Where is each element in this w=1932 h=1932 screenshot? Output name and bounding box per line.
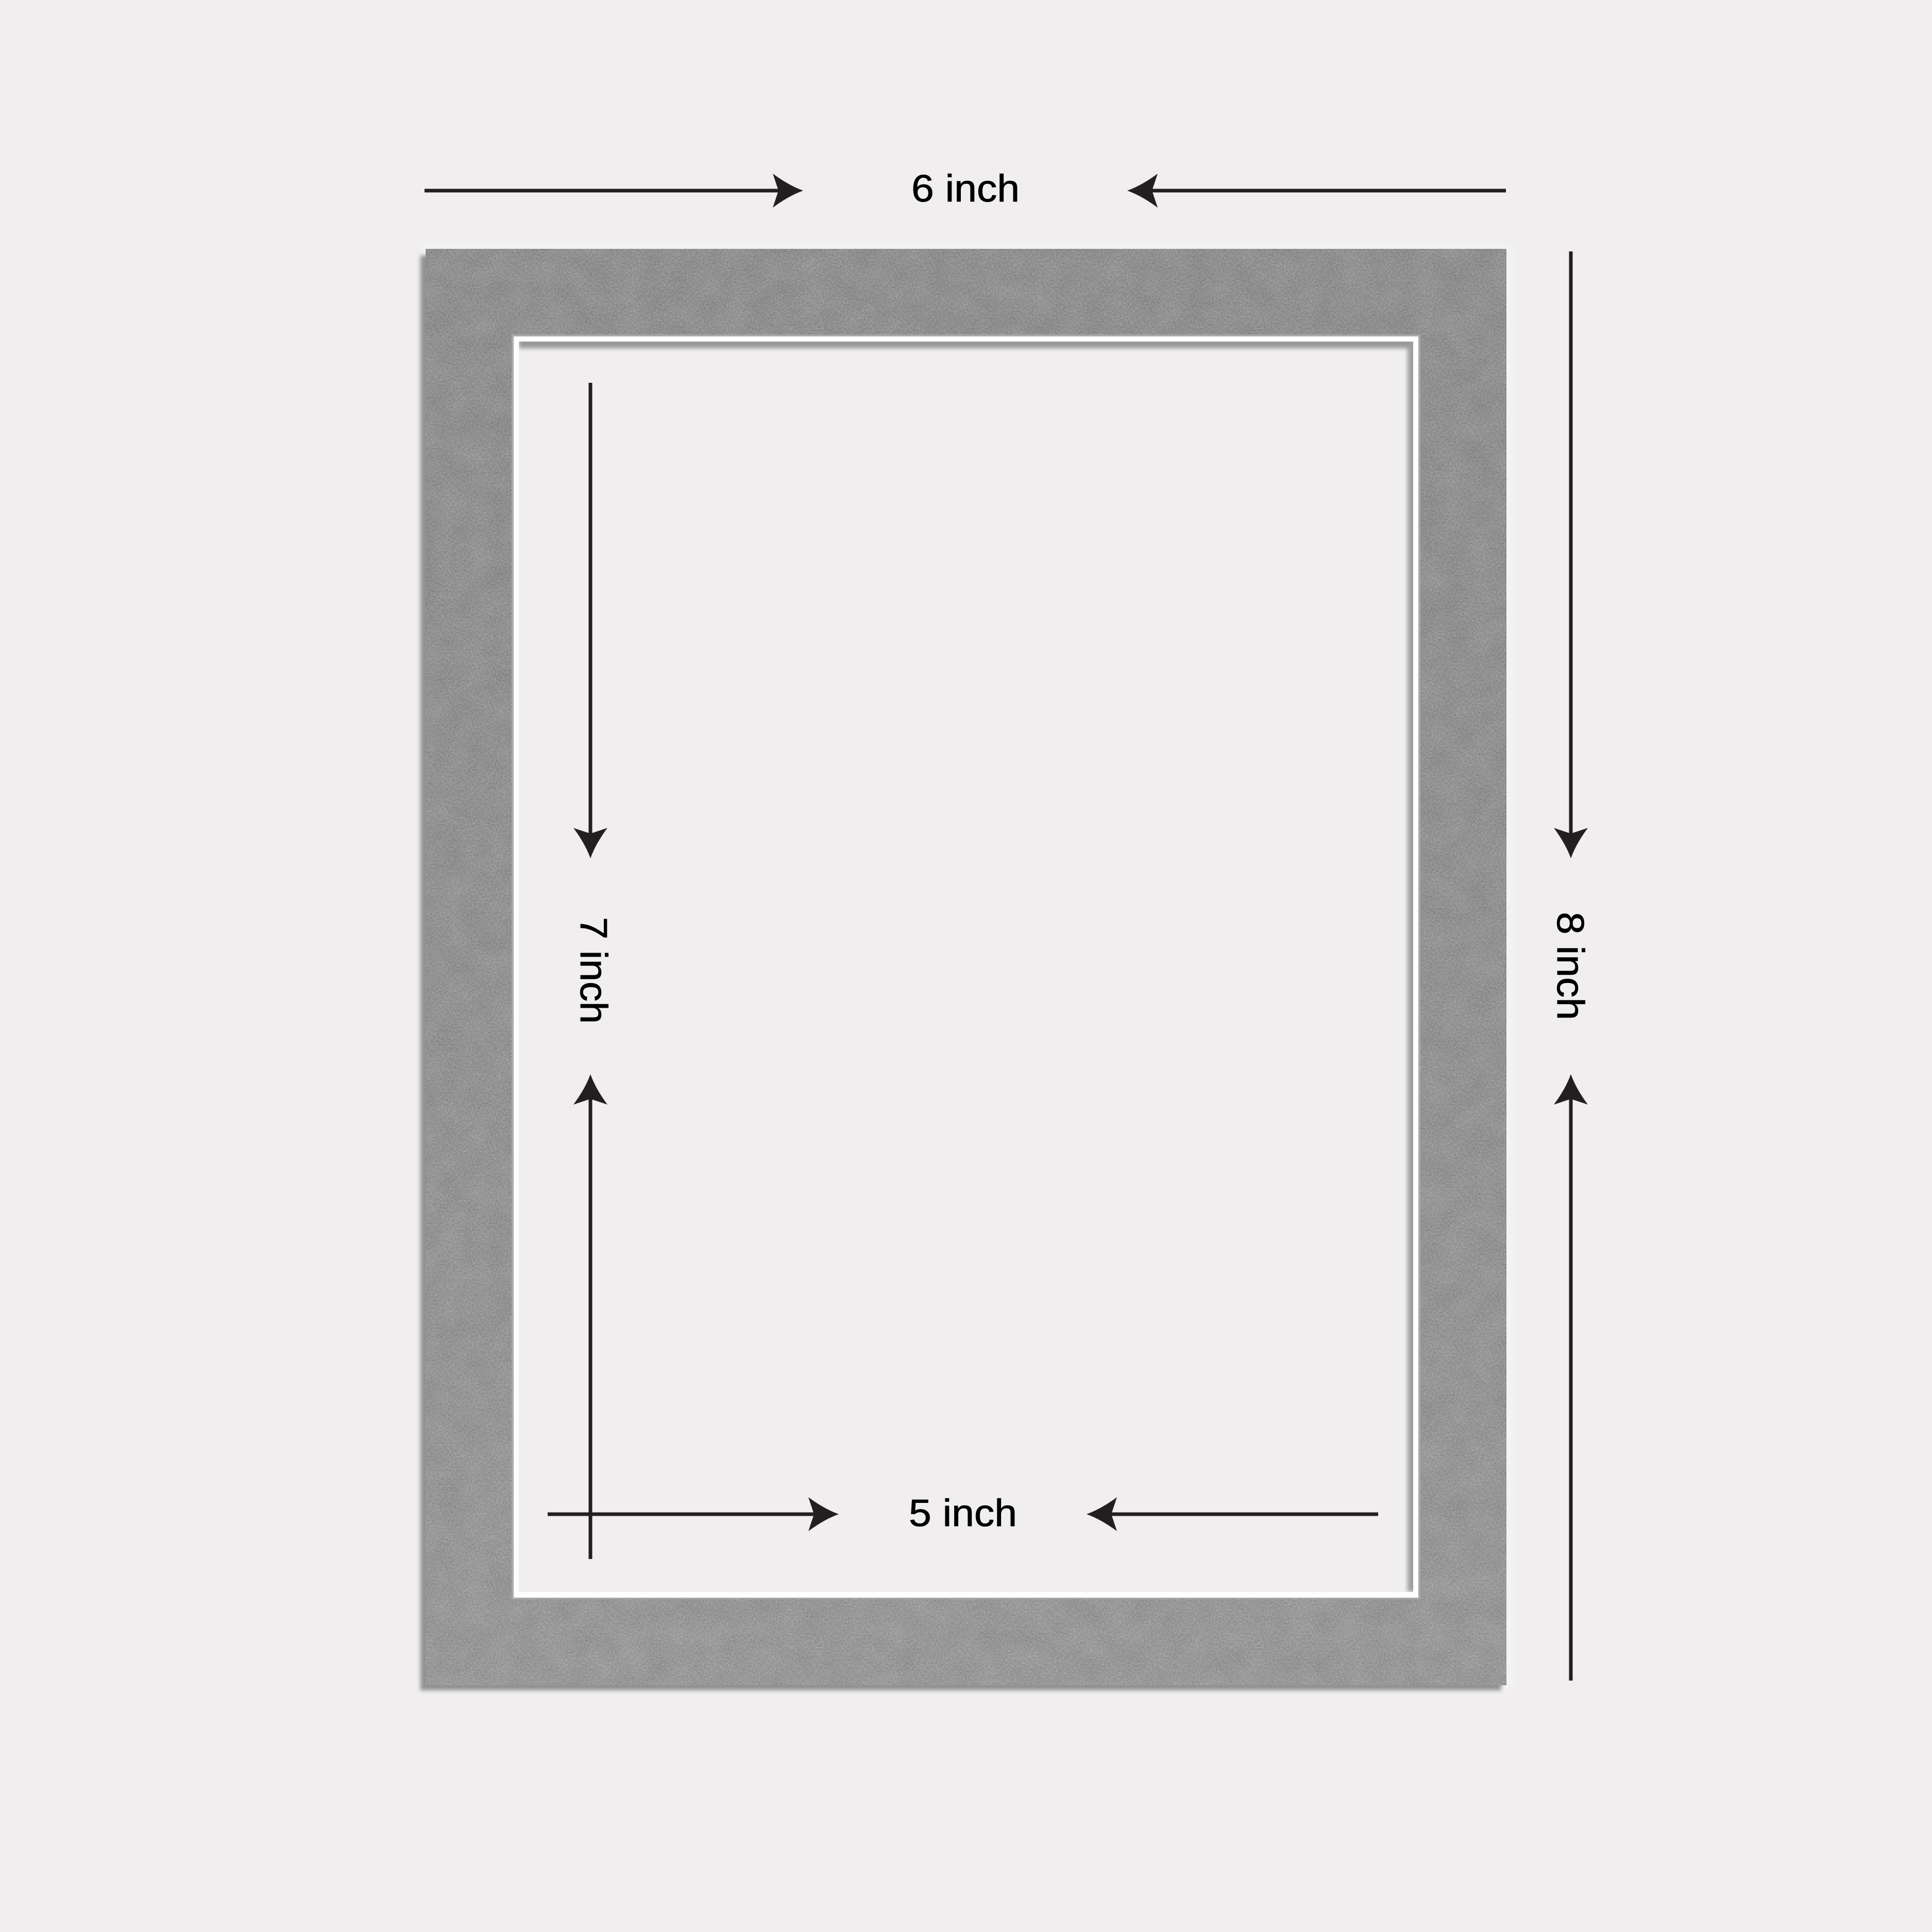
arrow: top left pointing right <box>425 174 803 208</box>
arrow: outer right pointing up <box>1554 1074 1588 1681</box>
label: 6 inch: 6 inch <box>911 167 1020 210</box>
label: 5 inch: 5 inch <box>909 1492 1017 1534</box>
arrow: outer right pointing down <box>1554 251 1588 858</box>
arrow: top right pointing left <box>1127 174 1506 208</box>
arrow: inner left pointing up <box>573 1074 607 1559</box>
arrow: bottom left pointing right <box>548 1497 839 1531</box>
arrow: bottom right pointing left <box>1087 1497 1378 1531</box>
label: 7 inch: 7 inch <box>572 917 615 1024</box>
arrow: inner left pointing down <box>573 383 607 858</box>
label: 8 inch: 8 inch <box>1549 912 1592 1020</box>
panel: grey photo mat with opening <box>420 245 1512 1690</box>
